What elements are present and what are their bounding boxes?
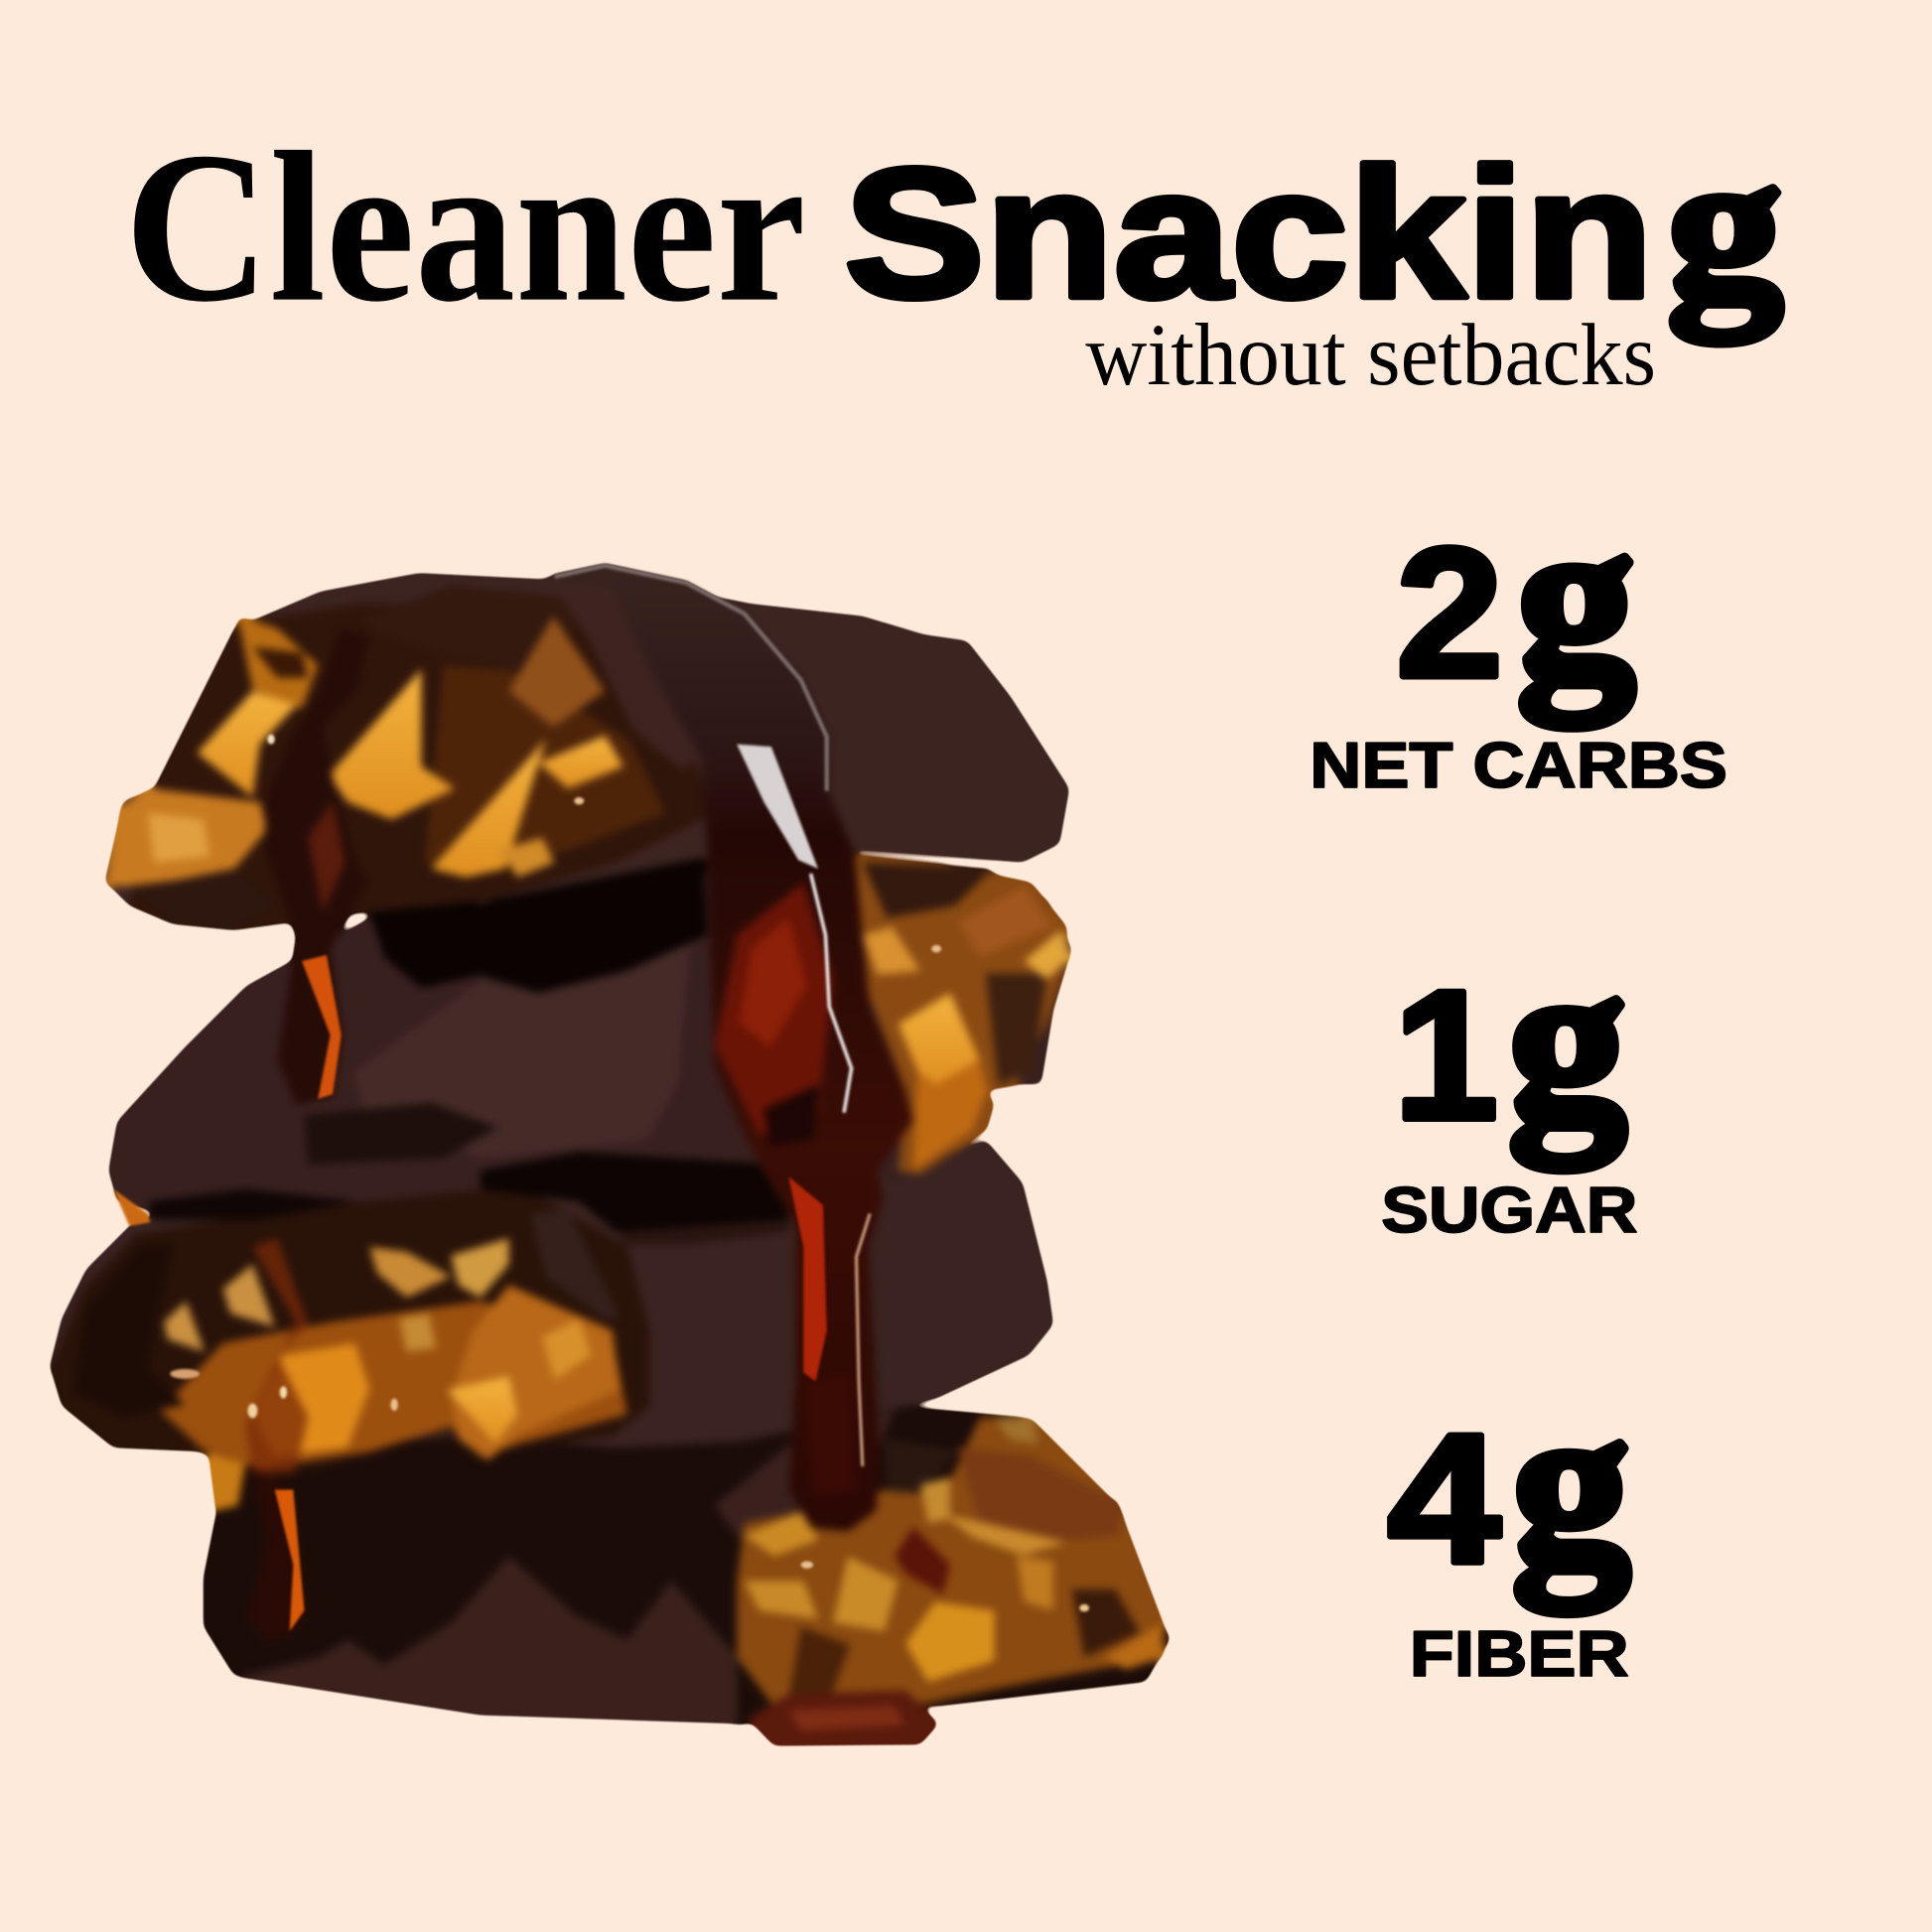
subtitle: without setbacks — [1085, 306, 1656, 404]
value: g — [1508, 913, 1626, 1171]
value: 2 — [1396, 509, 1503, 716]
value: g — [1517, 471, 1635, 728]
fine syrup streaks and glints — [113, 566, 1089, 1631]
left syrup drip — [265, 628, 369, 1105]
bar 1 top — [104, 567, 1069, 930]
title — [124, 107, 1783, 404]
main syrup drip — [546, 563, 913, 1532]
stat: 2g net carbs — [1310, 471, 1727, 801]
bar 3 — [50, 1140, 1053, 1511]
heading word: Snacking: Snackin — [844, 130, 1654, 337]
value: 1 — [1394, 952, 1498, 1159]
value: g — [1512, 1357, 1630, 1614]
soft tonal base of the stacked bars — [50, 563, 1171, 1746]
label: FIBER — [1410, 1618, 1629, 1690]
label: SUGAR — [1381, 1174, 1637, 1246]
small lower syrup drip — [249, 1468, 305, 1640]
heading word: Snacking: g — [1667, 109, 1783, 344]
product photo: stack of chocolate nut bars with syrup — [50, 563, 1171, 1746]
stat: 4g fiber — [1387, 1357, 1630, 1690]
bar 4 bottom — [204, 1405, 1171, 1725]
stat: 1g sugar — [1381, 913, 1637, 1246]
value: 4 — [1387, 1396, 1501, 1602]
heading word: Cleaner: Cleaner — [124, 107, 806, 346]
bar 2 — [108, 819, 1072, 1232]
label: NET CARBS — [1310, 730, 1727, 801]
syrup puddle — [748, 1691, 939, 1746]
